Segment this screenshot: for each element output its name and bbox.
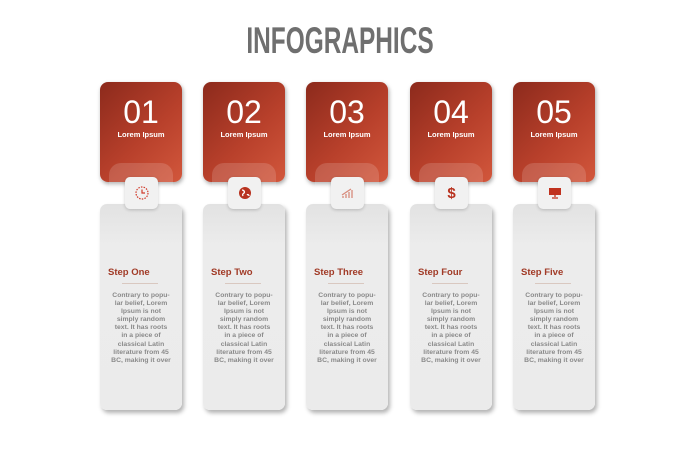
text block 3: [317, 292, 377, 364]
text block 2: [214, 292, 274, 364]
heading step one: Step One: [108, 267, 150, 278]
text block 5: BC, making it over: [524, 357, 584, 364]
icon: monitor: [538, 177, 571, 209]
text block 5: [524, 292, 584, 364]
number block 04: 04: [433, 94, 469, 130]
text block 2: Ipsum is not: [224, 308, 264, 315]
number block 01: 01: [123, 94, 159, 130]
text block 3: Ipsum is not: [327, 308, 367, 315]
text block 2: Contrary to popu-: [215, 292, 273, 299]
number block 02: [203, 82, 285, 182]
text block 2: text. It has roots: [218, 324, 270, 331]
text block 2: lar belief, Lorem: [218, 300, 270, 307]
text block 1: in a piece of: [121, 332, 161, 339]
text block 3: BC, making it over: [317, 357, 377, 364]
heading step two: Step Two: [211, 267, 253, 278]
heading step four: Step Four: [418, 267, 462, 278]
text block 4: in a piece of: [431, 332, 471, 339]
text block 1: BC, making it over: [111, 357, 171, 364]
text card 4: [410, 204, 492, 410]
panel: step 5: [511, 81, 600, 416]
text block 3: simply random: [323, 316, 371, 323]
text block 4: Ipsum is not: [431, 308, 471, 315]
number block 03: Lorem Ipsum: [323, 130, 371, 139]
heading step five: Step Five: [521, 267, 563, 278]
text block 5: text. It has roots: [528, 324, 580, 331]
text block 2: literature from 45: [216, 349, 272, 356]
text block 4: simply random: [427, 316, 475, 323]
text block 1: classical Latin: [118, 341, 164, 348]
text block 3: classical Latin: [324, 341, 370, 348]
heading step three: Step Three: [314, 267, 363, 278]
text block 4: text. It has roots: [425, 324, 477, 331]
text block 4: BC, making it over: [421, 357, 481, 364]
number block 05: Lorem Ipsum: [530, 130, 578, 139]
text block 3: literature from 45: [319, 349, 375, 356]
text block 4: [421, 292, 481, 364]
number block 02: Lorem Ipsum: [220, 130, 268, 139]
text block 4: Contrary to popu-: [422, 292, 480, 299]
text card 3: [306, 204, 388, 410]
icon: dollar: [435, 177, 468, 209]
icon: chart: [331, 177, 364, 209]
number block 03: 03: [329, 94, 365, 130]
number block 04: Lorem Ipsum: [427, 130, 475, 139]
text block 4: lar belief, Lorem: [425, 300, 477, 307]
text block 1: simply random: [117, 316, 165, 323]
text block 1: text. It has roots: [115, 324, 167, 331]
text block 5: literature from 45: [526, 349, 582, 356]
panel: step 2: [201, 81, 290, 416]
number block 05: 05: [536, 94, 572, 130]
icon: clock: [125, 177, 158, 209]
panel: step 1: [98, 81, 186, 416]
text block 1: [111, 292, 171, 364]
text block 1: lar belief, Lorem: [115, 300, 167, 307]
text block 5: Ipsum is not: [534, 308, 574, 315]
number block 02: 02: [226, 94, 262, 130]
text block 5: in a piece of: [534, 332, 574, 339]
text block 3: Contrary to popu-: [318, 292, 376, 299]
title: INFOGRAPHICS: [246, 20, 434, 61]
text block 5: lar belief, Lorem: [528, 300, 580, 307]
text card 5: [513, 204, 595, 410]
text block 3: text. It has roots: [321, 324, 373, 331]
text block 2: in a piece of: [224, 332, 264, 339]
text block 2: classical Latin: [221, 341, 267, 348]
text block 3: lar belief, Lorem: [321, 300, 373, 307]
text block 1: Contrary to popu-: [112, 292, 170, 299]
text block 1: literature from 45: [113, 349, 169, 356]
text block 3: in a piece of: [327, 332, 367, 339]
number block 03: [306, 82, 388, 182]
text block 5: classical Latin: [531, 341, 577, 348]
text block 5: simply random: [530, 316, 578, 323]
text card 2: [203, 204, 285, 410]
icon: dollar: $: [447, 184, 456, 202]
panel: step 4: [408, 81, 496, 416]
text block 2: BC, making it over: [214, 357, 274, 364]
number block 01: [100, 82, 182, 182]
number block 05: [513, 82, 595, 182]
text block 4: literature from 45: [423, 349, 479, 356]
text block 2: simply random: [220, 316, 268, 323]
text card 1: [100, 204, 182, 410]
text block 1: Ipsum is not: [121, 308, 161, 315]
text block 5: Contrary to popu-: [525, 292, 583, 299]
text block 4: classical Latin: [428, 341, 474, 348]
number block 01: Lorem Ipsum: [117, 130, 165, 139]
number block 04: [410, 82, 492, 182]
panel: step 3: [304, 81, 392, 416]
icon: globe: [228, 177, 261, 209]
